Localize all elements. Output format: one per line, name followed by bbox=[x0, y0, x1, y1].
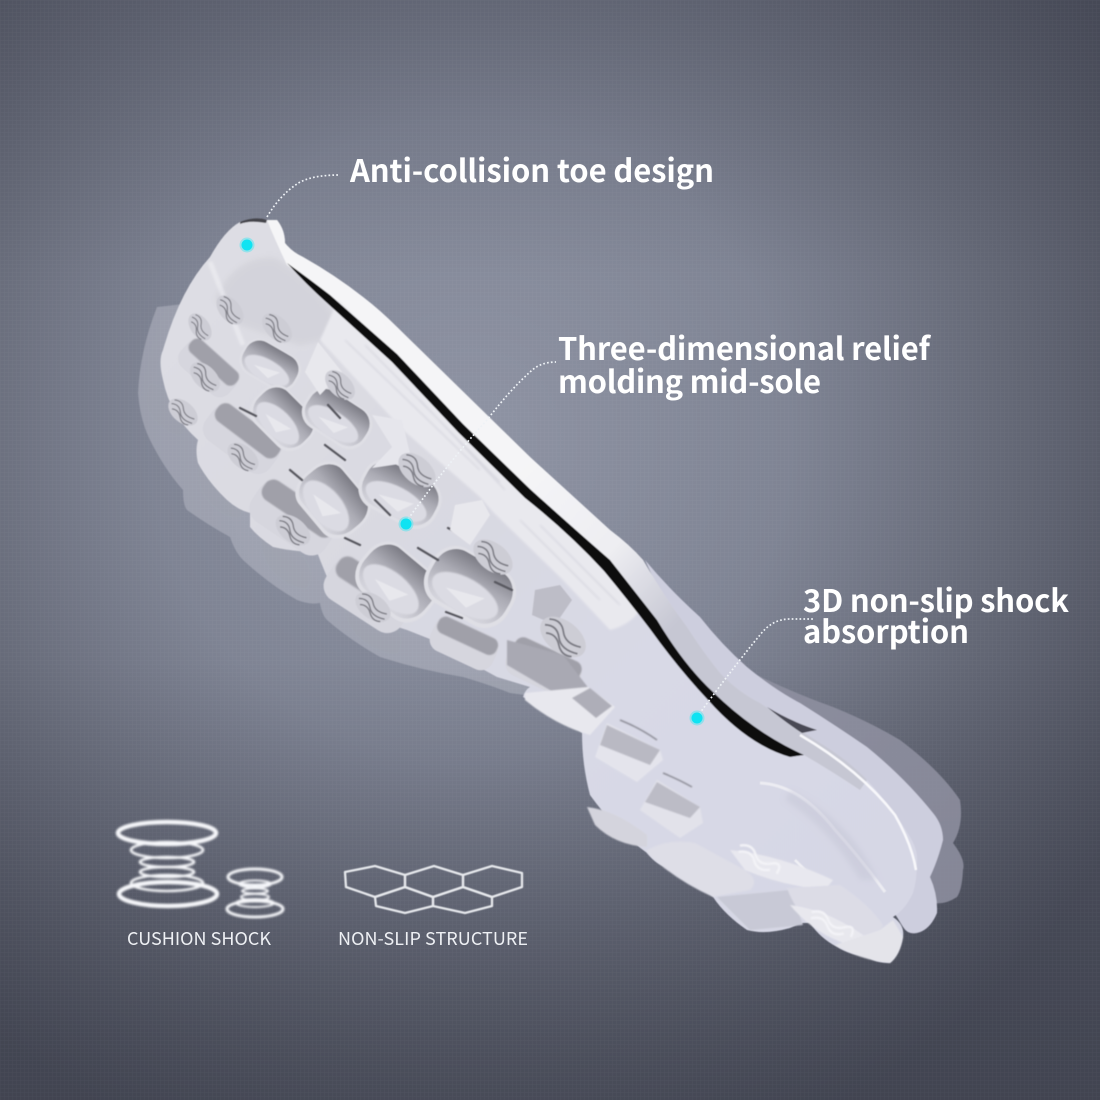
white heel edge bbox=[800, 735, 916, 870]
leader line: toe bbox=[267, 175, 340, 217]
heading: shock absorption feature: 3D non-slip shock bbox=[803, 576, 1069, 621]
icon: cushion springs bbox=[118, 822, 283, 917]
heading: mid-sole feature bbox=[558, 324, 931, 402]
band between rim edge and black line bbox=[267, 220, 867, 790]
heel ridge bbox=[760, 783, 885, 892]
label: cushion shock: CUSHION SHOCK bbox=[127, 925, 271, 951]
heel block lugs bbox=[507, 640, 903, 963]
toe shading bbox=[215, 258, 345, 345]
heading: mid-sole feature: Three-dimensional relief bbox=[558, 324, 931, 369]
heading: shock absorption feature: absorption bbox=[803, 607, 969, 652]
leader line: mid-sole bbox=[406, 362, 556, 522]
leader line: heel bbox=[697, 619, 815, 717]
ghost motion trail: forefoot bbox=[134, 300, 560, 700]
slits between pods bbox=[240, 372, 512, 618]
heading: mid-sole feature: molding mid-sole bbox=[558, 357, 821, 402]
heading: toe feature: Anti-collision toe design bbox=[349, 146, 714, 191]
textured tread lugs bbox=[163, 290, 593, 666]
forefoot pods and bars bbox=[173, 333, 586, 702]
star shaped ridges bbox=[305, 342, 342, 395]
dark heel slit bbox=[767, 707, 817, 733]
marker dot: mid-sole bbox=[398, 516, 414, 532]
shoe sole illustration bbox=[134, 218, 964, 963]
heading: shock absorption feature bbox=[803, 576, 1069, 652]
ghost motion trail: heel outer bbox=[650, 570, 964, 903]
label: non-slip structure: NON-SLIP STRUCTURE bbox=[338, 925, 528, 951]
side wall ribbed texture bbox=[320, 300, 640, 630]
ghost motion trail: heel inner bbox=[645, 560, 943, 933]
black midsole line bbox=[287, 263, 804, 757]
main sole body bbox=[160, 219, 917, 963]
icon: hexagon structure bbox=[345, 866, 522, 913]
marker dot: toe bbox=[240, 238, 254, 252]
marker dot: heel bbox=[690, 710, 704, 726]
